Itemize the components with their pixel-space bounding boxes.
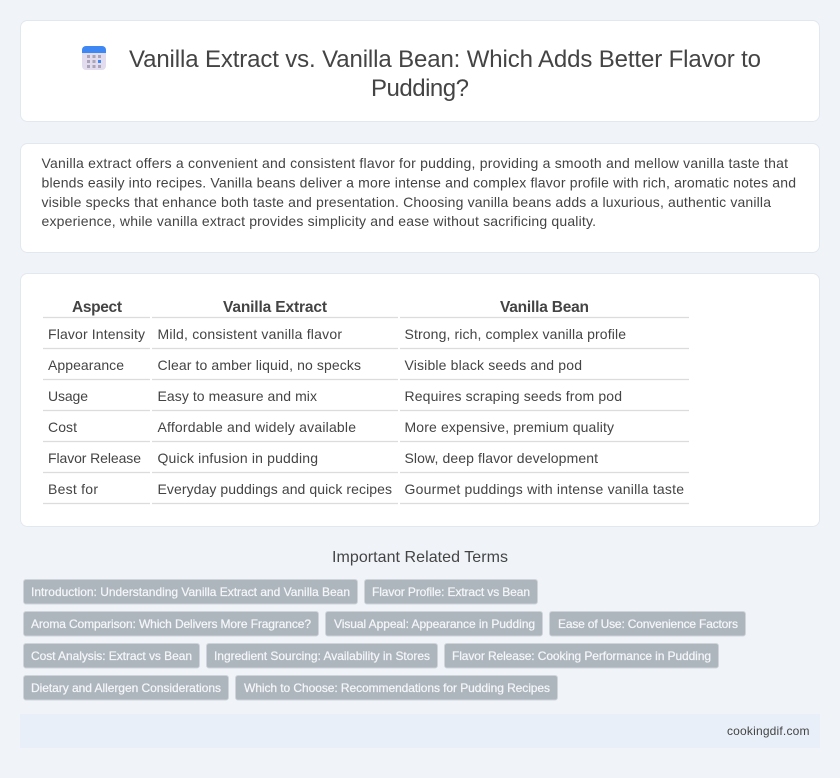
table row: flavor release: Flavor Release <box>48 450 141 466</box>
panel: related terms <box>24 549 746 700</box>
tag: flavor profile <box>364 580 538 604</box>
title: Pudding? <box>371 75 469 102</box>
table row: flavor release <box>48 450 598 466</box>
table row: usage: Easy to measure and mix <box>158 388 317 404</box>
tag: which to choose <box>236 676 558 700</box>
table row: usage: Usage <box>48 388 88 404</box>
text block: introduction: blends easily into recipes. Vanilla beans deliver a more intense and complex flavor profile with rich, aromatic notes and <box>42 174 796 190</box>
table row: cost: Affordable and widely available <box>158 419 356 435</box>
table row: cost: Cost <box>48 419 77 435</box>
text block: introduction: experience, while vanilla extract provides simplicity and ease without sacrificing quality. <box>42 213 596 229</box>
table row: appearance <box>48 357 582 373</box>
table row: cost: More expensive, premium quality <box>404 419 614 435</box>
table row: usage <box>48 388 622 404</box>
tag: ingredient sourcing: Ingredient Sourcing: Availability in Stores <box>214 649 430 663</box>
panel: title header <box>20 20 820 122</box>
tag: flavor profile: Flavor Profile: Extract vs Bean <box>372 585 530 599</box>
table row: best for: Gourmet puddings with intense vanilla taste <box>404 481 684 497</box>
footer: cookingdif.com <box>727 724 810 738</box>
footer <box>20 714 820 748</box>
table row: flavor release: Slow, deep flavor development <box>404 450 598 466</box>
table header: Vanilla Bean <box>500 299 589 316</box>
panel: comparison table <box>20 274 820 526</box>
table row: appearance: Clear to amber liquid, no specks <box>158 357 361 373</box>
tag: dietary and allergen <box>24 676 228 700</box>
tag: ease of use <box>550 612 746 636</box>
table row: appearance: Appearance <box>48 357 124 373</box>
tag: introduction <box>24 580 358 604</box>
tag: cost analysis: Cost Analysis: Extract vs Bean <box>31 649 192 663</box>
title <box>129 46 761 102</box>
heading: important related terms: Important Related Terms <box>332 549 508 566</box>
panel: introduction text <box>20 144 820 252</box>
table row: best for: Best for <box>48 481 98 497</box>
table header <box>72 299 589 316</box>
table row: flavor release: Quick infusion in pudding <box>158 450 318 466</box>
table header: Aspect <box>72 299 122 316</box>
icon: calendar <box>82 46 106 70</box>
table row: usage: Requires scraping seeds from pod <box>404 388 622 404</box>
table row: best for: Everyday puddings and quick recipes <box>158 481 392 497</box>
tag: ingredient sourcing <box>206 644 438 668</box>
tag: introduction: Introduction: Understanding Vanilla Extract and Vanilla Bean <box>31 585 350 599</box>
tag: flavor release: Flavor Release: Cooking Performance in Pudding <box>452 649 711 663</box>
table row: flavor intensity <box>48 326 626 342</box>
table row: flavor intensity: Mild, consistent vanilla flavor <box>158 326 342 342</box>
table row: best for <box>48 481 684 497</box>
table header: Vanilla Extract <box>223 299 327 316</box>
text block: introduction <box>42 155 796 229</box>
table row: appearance: Visible black seeds and pod <box>404 357 582 373</box>
table row: cost <box>48 419 614 435</box>
title: Vanilla Extract vs. Vanilla Bean: Which Adds Better Flavor to <box>129 46 761 73</box>
tag: ease of use: Ease of Use: Convenience Factors <box>558 617 738 631</box>
text block: introduction: visible specks that enhance both taste and presentation. Choosing vanilla beans adds a luxurious, authentic vanilla <box>42 194 771 210</box>
table row: flavor intensity: Flavor Intensity <box>48 326 145 342</box>
tag: cost analysis <box>24 644 200 668</box>
tag: visual appeal: Visual Appeal: Appearance in Pudding <box>334 617 535 631</box>
text block: introduction: Vanilla extract offers a convenient and consistent flavor for pudding, providing a smooth and mellow vanilla taste that <box>42 155 788 171</box>
tag: aroma comparison: Aroma Comparison: Which Delivers More Fragrance? <box>31 617 311 631</box>
tag: aroma comparison <box>24 612 318 636</box>
tag: which to choose: Which to Choose: Recommendations for Pudding Recipes <box>244 681 550 695</box>
tag: visual appeal <box>326 612 542 636</box>
tag: dietary and allergen: Dietary and Allergen Considerations <box>31 681 221 695</box>
tag: flavor release <box>444 644 718 668</box>
table row: flavor intensity: Strong, rich, complex vanilla profile <box>404 326 626 342</box>
